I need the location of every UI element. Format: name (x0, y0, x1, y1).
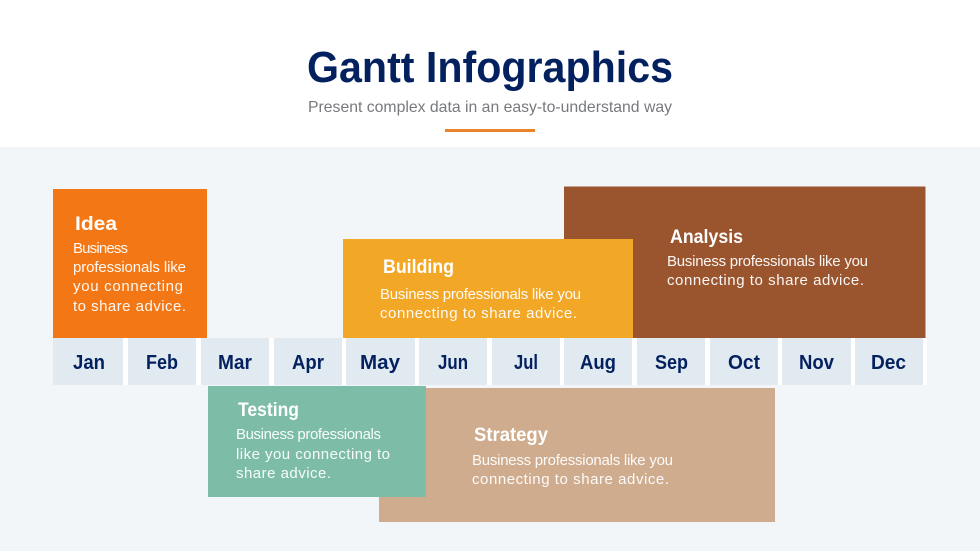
heading: Analysis: Analysis (670, 227, 743, 248)
month: Dec (855, 338, 923, 385)
heading: Idea: Idea (75, 214, 117, 235)
heading: Strategy: Strategy (474, 425, 548, 446)
body: Idea: you connecting (73, 278, 183, 295)
month: Oct (710, 338, 778, 385)
month: Mar: Mar (218, 352, 252, 374)
subtitle: Present complex data in an easy-to-understand way (308, 99, 672, 116)
panel: Analysis (564, 186, 926, 338)
title: Gantt Infographics (307, 43, 673, 92)
body: Idea: Business (73, 240, 128, 257)
month: May: May (360, 352, 401, 374)
body: Building: Business professionals like you (380, 286, 581, 303)
panel: Testing (208, 386, 426, 497)
panel: Building (343, 239, 633, 338)
month: Jun: Jun (438, 352, 468, 374)
month: May (346, 338, 415, 385)
body: Strategy: connecting to share advice. (472, 471, 669, 488)
month: Jul (492, 338, 560, 385)
month: Jan (53, 338, 123, 385)
body: Strategy: Business professionals like you (472, 452, 673, 469)
month: Nov (782, 338, 851, 385)
body: Idea: to share advice. (73, 298, 186, 315)
month: Jun (419, 338, 487, 385)
chart panel background (0, 147, 980, 551)
month: Oct: Oct (728, 352, 760, 374)
month: Aug: Aug (580, 352, 616, 374)
month: Aug (564, 338, 632, 385)
heading: Building: Building (383, 257, 454, 278)
month: Mar (201, 338, 269, 385)
body: Testing: like you connecting to (236, 446, 390, 463)
month axis (53, 338, 927, 385)
month: Feb (128, 338, 196, 385)
body: Idea: professionals like (73, 259, 186, 276)
heading: Testing: Testing (238, 400, 299, 421)
month: Nov: Nov (799, 352, 835, 374)
month: Jul: Jul (514, 352, 538, 374)
month: Sep (637, 338, 705, 385)
page header background (0, 0, 980, 147)
body: Building: connecting to share advice. (380, 305, 577, 322)
body: Analysis: Business professionals like you (667, 253, 868, 270)
month: Apr: Apr (292, 352, 324, 374)
panel: Idea (53, 189, 207, 338)
month: Dec: Dec (871, 352, 906, 374)
body: Testing: Business professionals (236, 426, 381, 443)
panel: Strategy (379, 388, 775, 522)
body: Analysis: connecting to share advice. (667, 272, 864, 289)
month: Apr (274, 338, 342, 385)
month: Feb: Feb (146, 352, 178, 374)
month: Jan: Jan (73, 352, 105, 374)
title underline accent (445, 129, 535, 132)
body: Testing: share advice. (236, 465, 331, 482)
month: Sep: Sep (655, 352, 688, 374)
